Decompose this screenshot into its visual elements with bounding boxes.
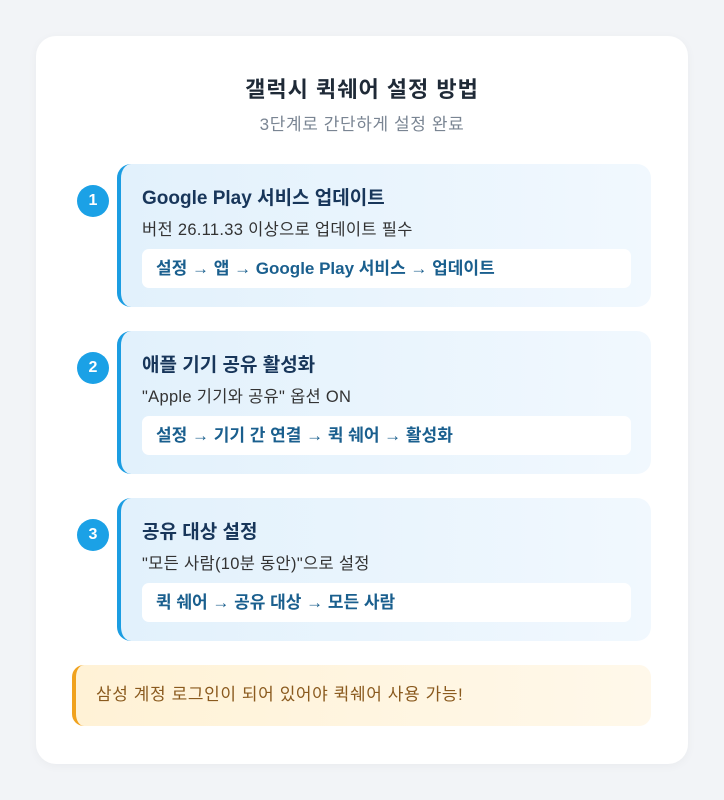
step 1 description: 버전 26.11.33 이상으로 업데이트 필수 [142, 221, 413, 239]
subtitle: 3단계로 간단하게 설정 완료 [260, 115, 464, 134]
step 3 title: 공유 대상 설정 [142, 522, 257, 543]
title: 갤럭시 퀵쉐어 설정 방법 [245, 77, 479, 102]
panel: step 3 [117, 498, 651, 641]
step number 2: 2 [89, 359, 97, 376]
panel: step 2 [117, 331, 651, 474]
step 1 path [142, 249, 631, 288]
step 3 description: "모든 사람(10분 동안)"으로 설정 [142, 555, 370, 573]
step 1 title: Google Play 서비스 업데이트 [142, 188, 385, 209]
step number 2 [77, 352, 109, 384]
step 2 path: 설정 → 기기 간 연결 → 퀵 쉐어 → 활성화 [156, 426, 453, 445]
step number 1: 1 [89, 192, 97, 209]
callout: note: 삼성 계정 로그인이 되어 있어야 퀵쉐어 사용 가능! [96, 685, 463, 704]
step number 3: 3 [89, 526, 97, 543]
step 2 path [142, 416, 631, 455]
step 1 path: 설정 → 앱 → Google Play 서비스 → 업데이트 [156, 259, 495, 278]
step 3 path: 퀵 쉐어 → 공유 대상 → 모든 사람 [156, 593, 395, 612]
step 2 title: 애플 기기 공유 활성화 [142, 355, 315, 376]
step number 1 [77, 185, 109, 217]
panel: step 1 [117, 164, 651, 307]
step number 3 [77, 519, 109, 551]
step 2 description: "Apple 기기와 공유" 옵션 ON [142, 388, 351, 406]
callout: note [72, 665, 651, 726]
step 3 path [142, 583, 631, 622]
